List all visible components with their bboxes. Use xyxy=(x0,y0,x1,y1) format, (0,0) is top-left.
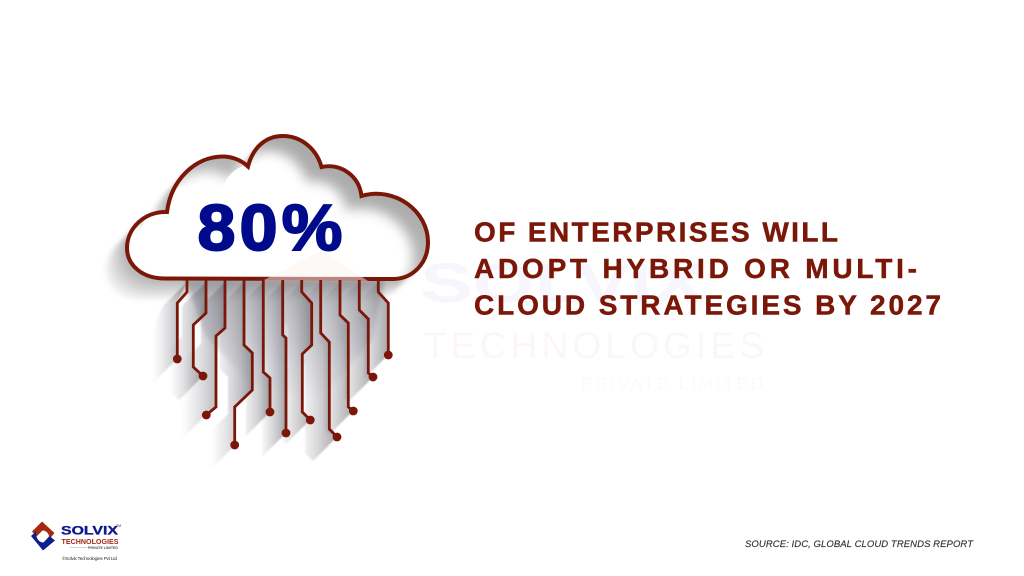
circuit end nodes xyxy=(173,351,393,449)
logo wordmark: TECHNOLOGIES xyxy=(62,539,119,546)
cloud body xyxy=(125,134,430,281)
watermark: Solvix Technologies: TM xyxy=(760,242,773,252)
circuit wires xyxy=(177,280,388,445)
headline text: CLOUD STRATEGIES BY 2027 xyxy=(474,289,941,320)
cloud long shadow xyxy=(105,140,424,301)
wire shadows xyxy=(153,282,388,469)
logo wordmark: SOLVIX xyxy=(61,526,118,538)
headline text: ADOPT HYBRID OR MULTI- xyxy=(474,253,917,284)
headline text xyxy=(474,217,941,320)
logo wordmark: PRIVATE LIMITED xyxy=(88,546,118,550)
big statistic: 80%: 80% xyxy=(198,191,346,264)
watermark: Solvix Technologies xyxy=(262,242,773,393)
shaded band under the cloud xyxy=(186,280,385,400)
logo wordmark: ©Solvix Technologies Pvt Ltd xyxy=(62,555,117,562)
logo wordmark: TM xyxy=(116,524,121,528)
logo mark xyxy=(31,522,55,550)
company logo xyxy=(31,522,121,562)
watermark: Solvix Technologies: PRIVATE LIMITED xyxy=(581,374,763,393)
logo wordmark xyxy=(61,524,121,562)
watermark: Solvix Technologies: TECHNOLOGIES xyxy=(424,325,764,366)
headline text: OF ENTERPRISES WILL xyxy=(474,217,838,248)
watermark: Solvix Technologies: SOLVIX xyxy=(420,251,705,314)
source note: SOURCE: IDC, GLOBAL CLOUD TRENDS REPORT xyxy=(745,539,974,550)
